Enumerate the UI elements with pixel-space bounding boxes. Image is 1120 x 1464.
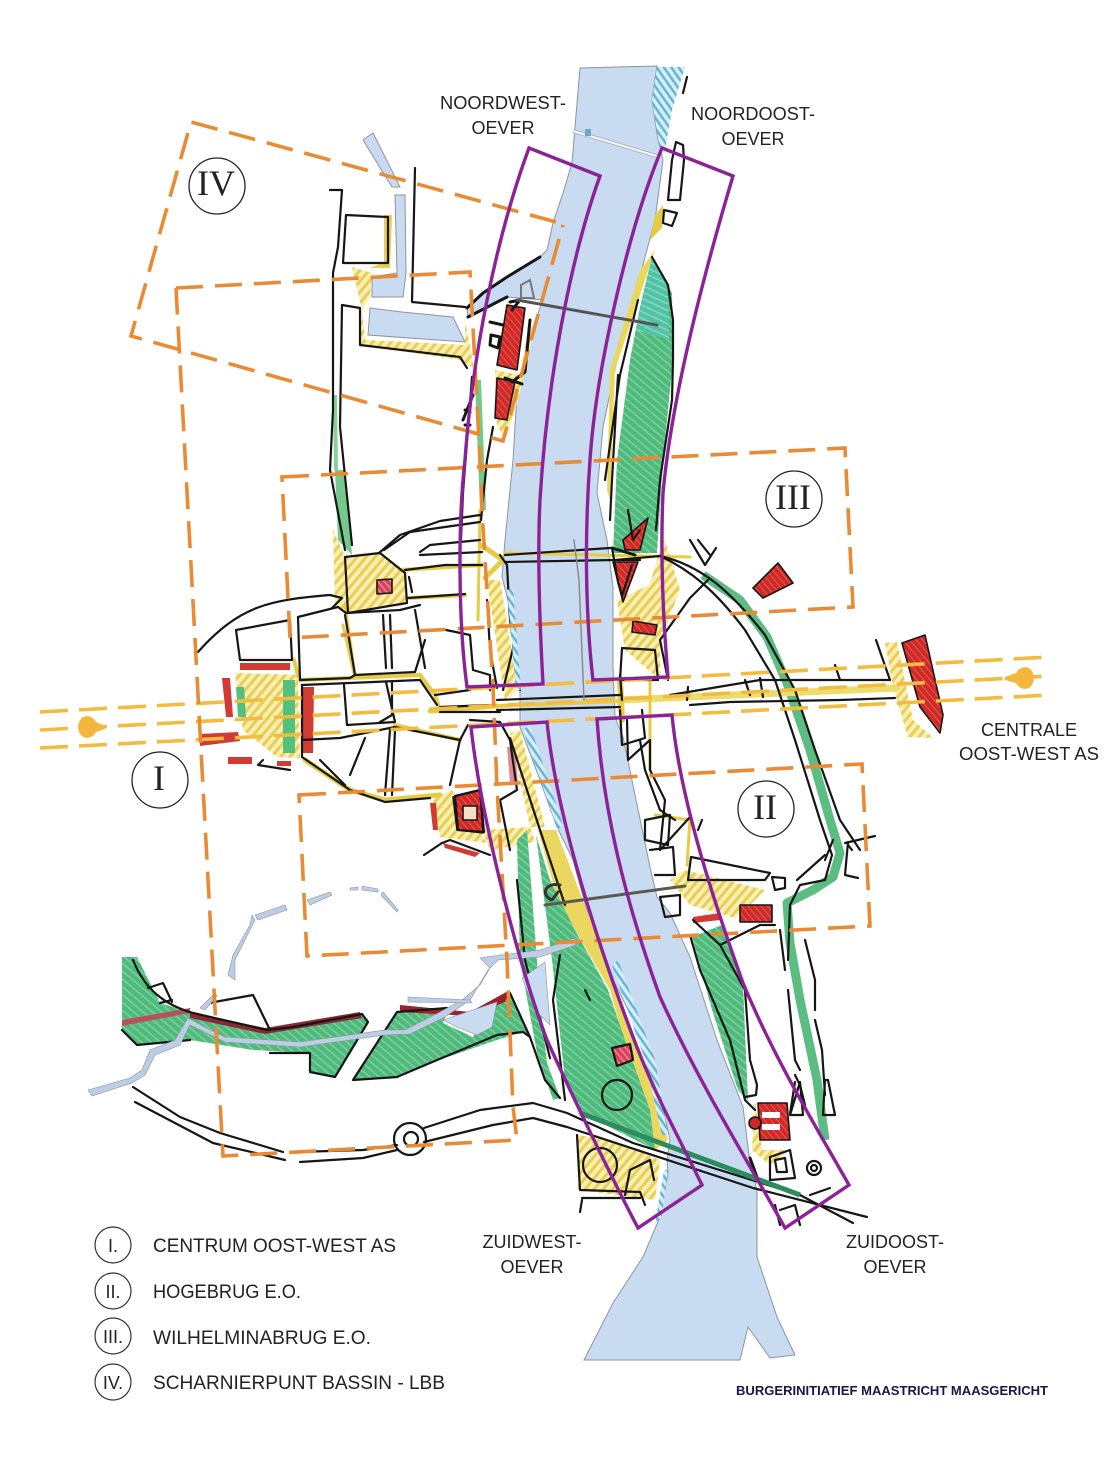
red small block <box>632 621 657 635</box>
legend item IV: IV. <box>103 1373 123 1393</box>
zone badge IV: IV <box>197 163 235 203</box>
label: centrale oost-west as: CENTRALE <box>981 720 1077 740</box>
zone badge II: II <box>753 787 777 827</box>
label: noordoost-oever: OEVER <box>721 129 785 149</box>
zone badge I <box>132 752 188 808</box>
icon: heart west <box>78 716 105 738</box>
east green corridor <box>703 575 840 1140</box>
legend item I <box>95 1227 396 1263</box>
purple box: zuidoost-oever <box>597 715 849 1228</box>
yellow strip along south-west bank <box>538 830 668 1150</box>
red wedge lower <box>613 562 638 602</box>
legend item II <box>95 1273 301 1309</box>
red courtyard <box>453 790 483 833</box>
legend item II: II. <box>105 1282 121 1302</box>
river Maas <box>467 66 795 1360</box>
zone III outline <box>282 448 853 638</box>
label: zuidoost-oever: OEVER <box>863 1257 927 1277</box>
bridges <box>517 280 685 905</box>
legend item I: CENTRUM OOST-WEST AS <box>153 1236 396 1257</box>
red wedge upper <box>623 518 648 550</box>
legend item III <box>95 1318 371 1354</box>
zone IV outline <box>131 122 563 441</box>
purple box: noordwest-oever <box>460 148 600 687</box>
zone II outline <box>299 764 870 956</box>
yellow zones <box>235 205 933 1200</box>
zone badge III <box>766 471 822 527</box>
bridge ramp south <box>545 885 560 900</box>
legend item IV: SCHARNIERPUNT BASSIN - LBB <box>153 1373 445 1394</box>
label: zuidwest-oever: OEVER <box>500 1257 564 1277</box>
north-east blue hatching <box>652 67 685 150</box>
legend item IV <box>95 1364 445 1400</box>
pink block south park <box>612 1044 633 1066</box>
red U building <box>758 1103 790 1140</box>
credit line: BURGERINITIATIEF MAASTRICHT MAASGERICHT <box>736 1383 1048 1398</box>
red block north-west 1 <box>497 305 525 370</box>
label: noordwest-oever: OEVER <box>471 118 535 138</box>
red block Hogebrug <box>740 905 772 922</box>
zone badge IV <box>189 158 245 214</box>
label: noordwest-oever: NOORDWEST- <box>440 93 566 113</box>
blue hatching along banks <box>507 588 668 1225</box>
zone badge I: I <box>153 758 165 798</box>
label: noordoost-oever: NOORDOOST- <box>691 104 815 124</box>
north bridge <box>517 300 657 325</box>
label: zuidwest-oever: ZUIDWEST- <box>482 1232 582 1252</box>
black street lines <box>122 77 895 1225</box>
purple box: noordoost-oever <box>586 148 733 680</box>
zone I outline <box>176 272 517 1156</box>
icon: heart east <box>1005 667 1034 689</box>
weir centre <box>574 540 584 700</box>
streams <box>88 886 576 1096</box>
red round tower <box>749 1117 761 1129</box>
pink block west <box>377 579 392 594</box>
legend item III: WILHELMINABRUG E.O. <box>153 1328 371 1349</box>
label: zuidoost-oever: ZUIDOOST- <box>846 1232 944 1252</box>
legend <box>95 1227 445 1400</box>
red buildings <box>377 305 943 1140</box>
bridge ramp north <box>521 280 534 298</box>
purple box: zuidwest-oever <box>471 722 702 1228</box>
north weir <box>573 129 660 157</box>
south bridge <box>545 886 685 905</box>
label: centrale oost-west as: OOST-WEST AS <box>959 744 1099 764</box>
red edge strips <box>122 663 720 1034</box>
green parks <box>122 257 748 1150</box>
legend item I: I. <box>108 1236 118 1256</box>
axis: centrale oost-west as <box>40 657 1050 748</box>
legend item II: HOGEBRUG E.O. <box>153 1282 301 1303</box>
harbour basins <box>363 133 465 342</box>
river edge thick black <box>463 257 758 1180</box>
zone badge III: III <box>775 477 811 517</box>
zone badge II <box>738 781 794 837</box>
south rail green <box>580 1113 800 1195</box>
red east block <box>753 563 793 598</box>
red block north-west 2 <box>495 378 515 420</box>
yellow streets <box>294 510 897 865</box>
red station <box>902 635 943 733</box>
legend item III: III. <box>103 1327 123 1347</box>
